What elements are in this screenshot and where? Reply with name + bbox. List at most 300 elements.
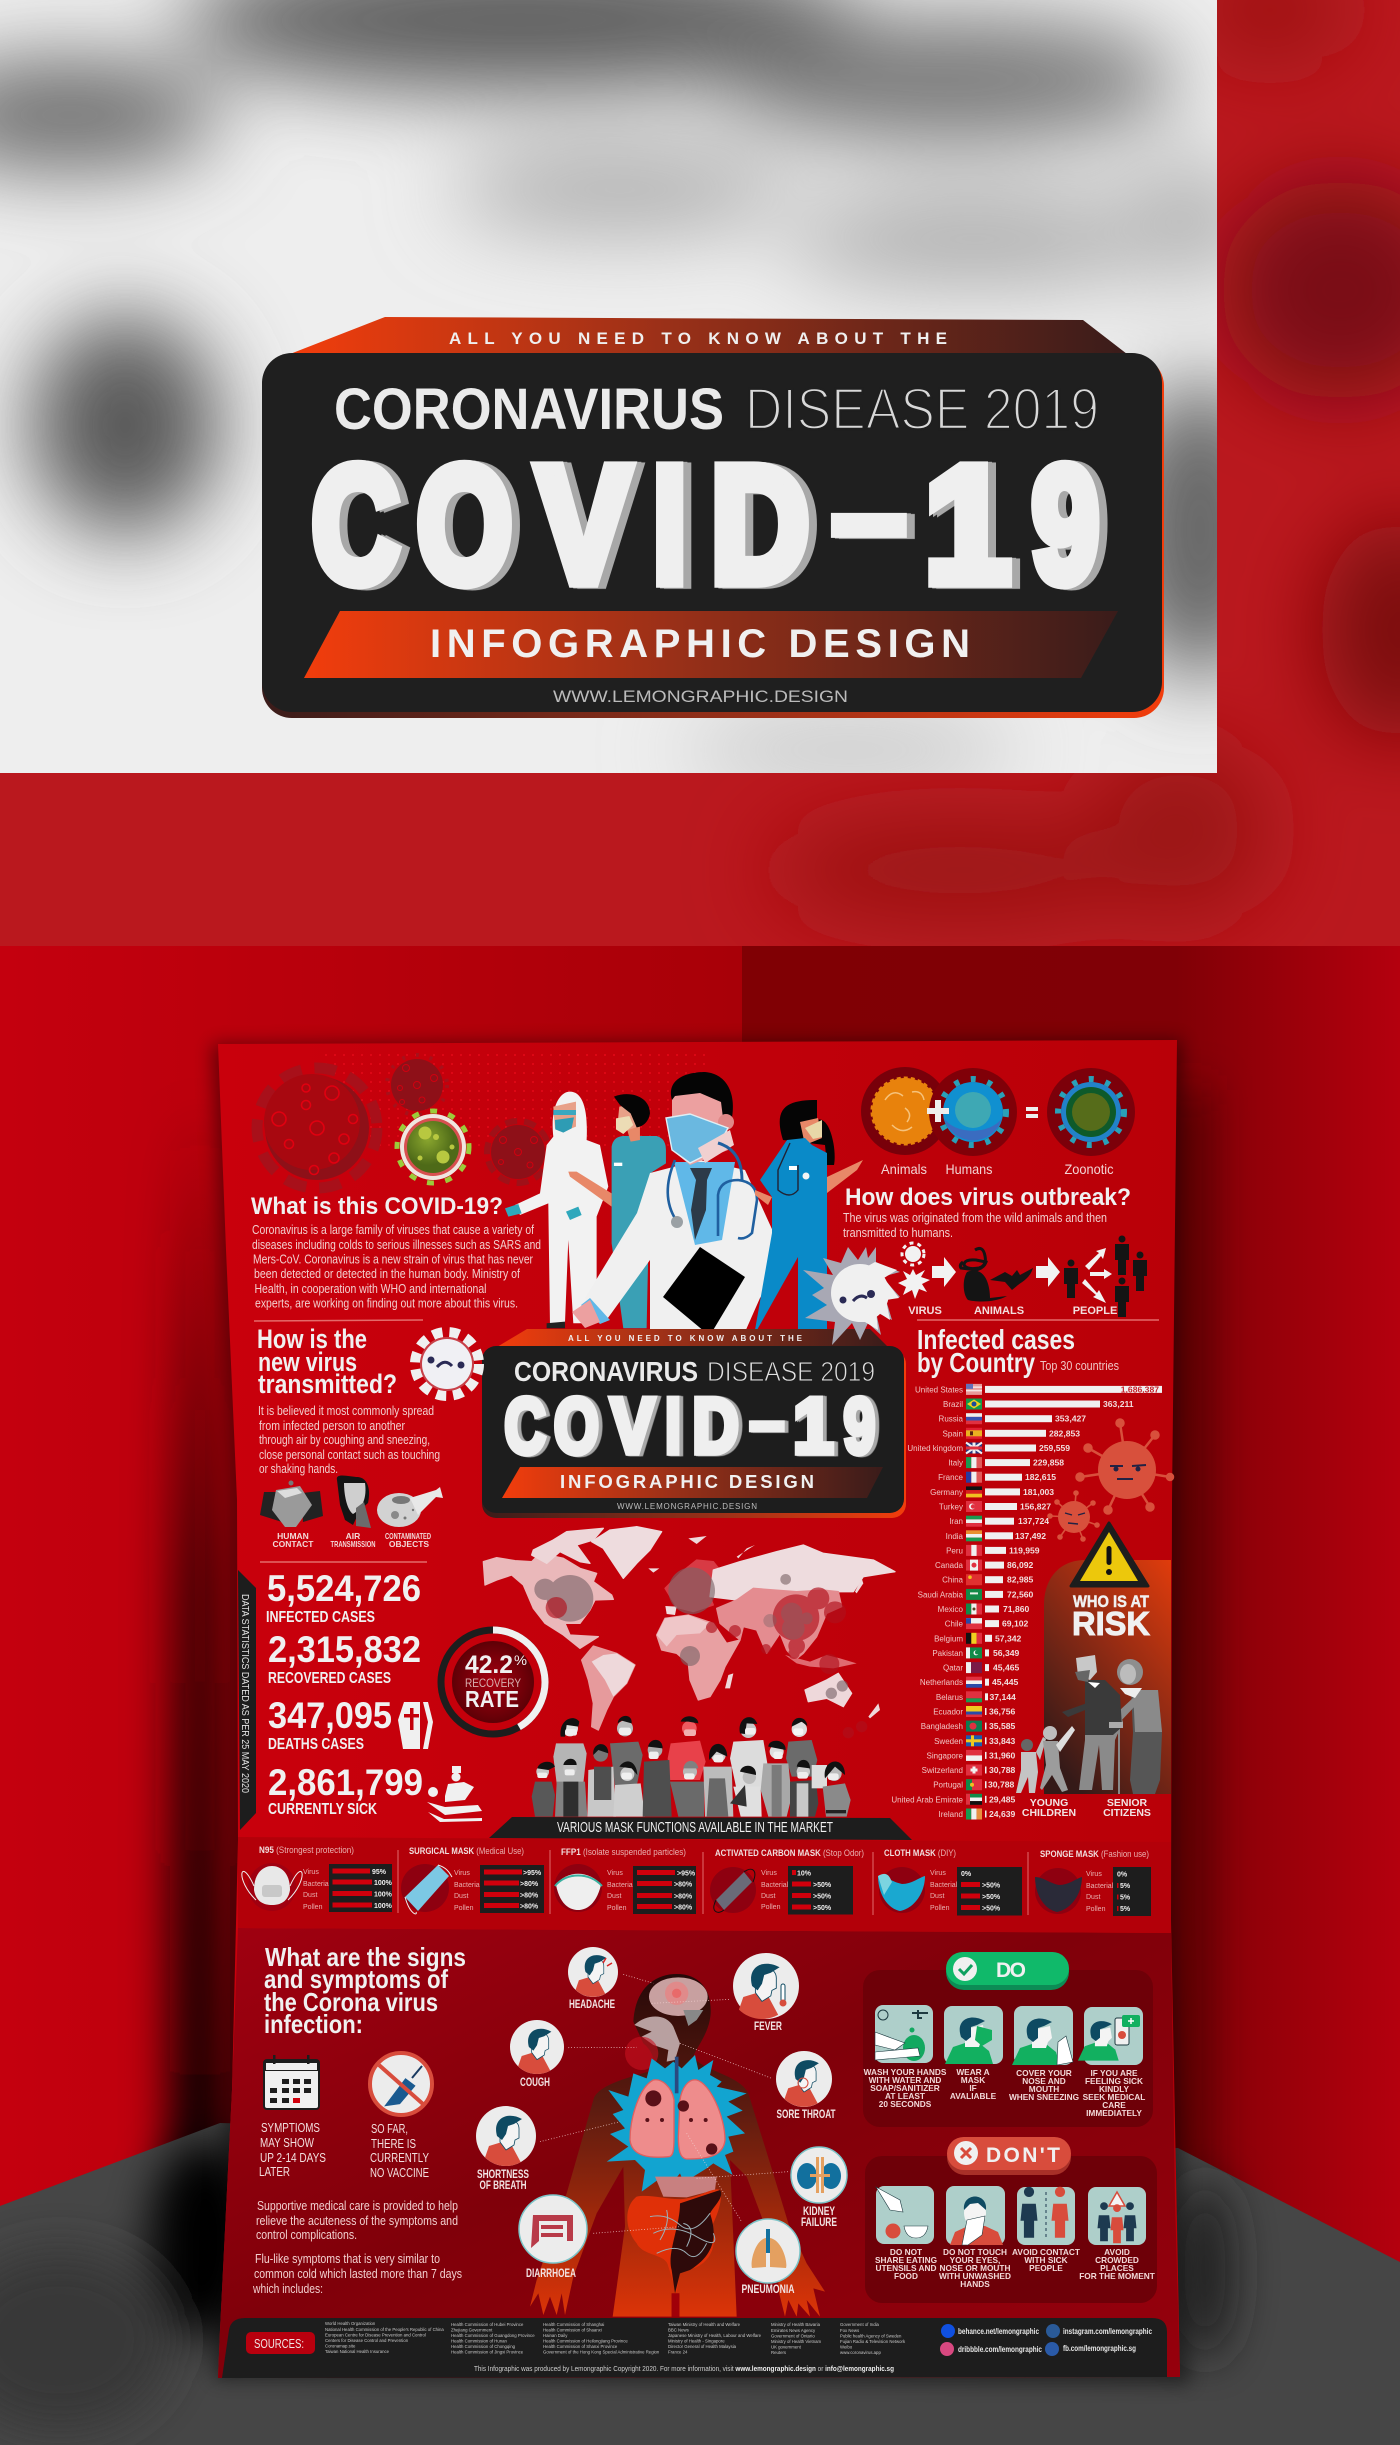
labels: SENIOR [1107,1797,1148,1809]
heading: infection: [264,2009,363,2039]
infected cases chart: 156,827 [1020,1502,1051,1512]
infected cases chart: 282,853 [1049,1428,1080,1438]
floor [0,2123,1400,2445]
infected cases chart: 353,427 [1055,1414,1086,1424]
table: >80% [520,1904,539,1910]
panel: do [863,1952,1153,2127]
blue burst [607,2055,747,2193]
labels: Pollen [454,1905,474,1912]
table [957,1867,1022,1916]
infected cases chart: 36,756 [989,1706,1016,1716]
table [788,1866,853,1914]
africa [657,1615,740,1700]
transmission section [257,1324,479,1549]
labels [930,1870,958,1912]
infected cases chart: Mexico [938,1605,964,1614]
source lists: Health Commission of Shanghai [543,2322,604,2327]
infected cases chart: 229,858 [1033,1458,1064,1468]
backdrop shadows on red surface [770,0,1400,925]
source lists: BBC News [668,2328,689,2332]
captions: DO NOT TOUCH [943,2247,1007,2257]
flu paragraph: common cold which lasted more than 7 days [254,2266,462,2281]
infected cases chart: 1,686,387 [1121,1384,1159,1394]
captions: PEOPLE [1029,2263,1063,2273]
paragraph: experts, are working on finding out more about this virus. [255,1296,518,1311]
infected cases chart: Qatar [943,1664,963,1673]
paragraph: from infected person to another [259,1418,406,1433]
icon: sponge mask [1035,1868,1082,1914]
table: >95% [523,1870,542,1877]
left lung [630,2080,674,2157]
statistics: DEATHS CASES [268,1736,364,1753]
captions: MOUTH [1029,2084,1059,2094]
pill: DO [996,1959,1026,1982]
infected cases chart: France [938,1473,964,1482]
infected cases chart: Portugal [933,1781,963,1790]
bar shape [489,1817,912,1840]
big title: - [825,421,913,603]
labels: Pollen [607,1905,627,1912]
labels [908,1305,1117,1317]
icon: carbon mask [710,1867,756,1913]
circle: animals [861,1067,949,1155]
infected cases chart: 72,560 [1007,1589,1034,1599]
labels: Virus [303,1869,319,1876]
badge card [262,353,1162,712]
icon labels: AIR [346,1531,360,1541]
paragraph: diseases including colds to serious illnesses such as SARS and [252,1237,541,1252]
labels: Pollen [930,1905,950,1912]
zoonotic diagram [861,1067,1135,1177]
vaccine text: SO FAR, [371,2121,408,2136]
symptom: headache: HEADACHE [569,1999,615,2011]
arctic russia islands [688,1536,755,1558]
panel background [865,2156,1157,2303]
people wearing masks [532,1716,851,1817]
infected cases chart [891,1324,1162,1820]
panel background [863,1970,1153,2127]
big title [312,421,1099,616]
tab [497,1329,888,1347]
card [482,1346,904,1513]
heading: Infected cases [917,1324,1075,1355]
icon: no vaccine [370,2053,432,2115]
labels: Humans [946,1161,992,1177]
tagline: ALL YOU NEED TO KNOW ABOUT THE [449,329,947,348]
site: WWW.LEMONGRAPHIC.DESIGN [617,1502,757,1511]
upper title badge [262,317,1164,718]
card side [482,1350,906,1518]
white paper sheet with leaf shadows [0,0,1285,780]
infected cases chart: 24,639 [989,1809,1016,1819]
lower photo: left wall [0,946,742,2246]
source lists: Japanese Ministry of Health, Labour and Welfare [668,2333,762,2338]
new zealand [868,1703,880,1718]
infected cases chart: Chile [945,1620,964,1629]
social: instagram [1046,2324,1152,2338]
captions: NOSE AND [1022,2076,1066,2086]
infected cases chart: Belgium [934,1634,963,1643]
table: >95% [677,1870,696,1878]
coronavirus: CORONAVIRUS [514,1356,698,1387]
heading: and symptoms of [264,1964,448,1994]
heading: transmitted? [258,1369,397,1399]
figure: blue nurse [755,1100,863,1330]
statistics: 5,524,726 [267,1568,421,1609]
centre disc [452,1641,534,1723]
big title: 1 [925,434,1010,616]
infected cases chart: Bangladesh [921,1722,963,1731]
captions: KINDLY [1099,2084,1130,2094]
arrow [1036,1257,1060,1287]
labels: Dust [454,1893,468,1900]
table: >50% [813,1894,832,1900]
banner text: INFOGRAPHIC DESIGN [430,622,970,666]
infected cases chart: Singapore [927,1751,964,1760]
irritation glow [625,2037,658,2070]
labels: VIRUS [908,1305,942,1317]
virus character white [415,1332,479,1396]
icon: person [1064,1260,1078,1298]
labels: YOUNG [1030,1797,1068,1809]
vaccine text [370,2121,429,2180]
paragraph: Coronavirus is a large family of viruses that cause a variety of [252,1222,534,1237]
social: dribbble [940,2342,1042,2356]
captions: CARE [1102,2100,1126,2110]
virus character spiky grey [803,1247,900,1345]
poster title badge [482,1329,906,1518]
labels: Animals [881,1161,927,1177]
source lists: Health Commission of Hunan [451,2338,507,2344]
source lists: Centers for Disease Control and Prevention [325,2338,409,2343]
labels [454,1870,482,1912]
labels: Pollen [761,1904,781,1911]
infected cases chart: Ireland [939,1810,963,1819]
source lists: www.coronavirus.app [840,2350,881,2355]
tab shape [238,1570,256,1830]
virus: small dark top [387,1055,447,1115]
social: dribbble: dribbble.com/lemongraphic [958,2345,1042,2354]
copyright line: This Infographic was produced by Lemongraphic Copyright 2020. For more information, visit www.lemongraphic.design or info@lemongraphic.sg [474,2366,894,2373]
icon: coffin [398,1702,433,1749]
badge top tab [290,317,1127,354]
infected cases chart: 45,445 [992,1677,1019,1687]
tab text: DATA STATISTICS DATED AS PER 25 MAY 2020 [239,1594,251,1793]
table: >80% [674,1894,693,1900]
labels: Dust [607,1893,621,1900]
heading: by Country [917,1347,1035,1378]
infected cases chart: Spain [943,1429,963,1438]
labels: Bacterial [930,1882,958,1889]
icon labels: OBJECTS [389,1539,429,1549]
captions: FOR THE MOMENT [1079,2271,1155,2281]
labels: Bacterial [454,1882,482,1889]
infected cases chart: 33,843 [989,1736,1016,1746]
virus: large dark [257,1068,377,1188]
world map [483,1527,895,1738]
who is at risk panel [1016,1523,1171,1819]
vaccine text: CURRENTLY [370,2150,429,2165]
spain [665,1606,677,1615]
icon: contaminated chicken [377,1487,443,1527]
title: O [554,1384,599,1470]
labels: Dust [761,1893,775,1900]
sources badge [246,2332,315,2354]
infected cases chart: 69,102 [1002,1619,1029,1629]
labels: Zoonotic [1064,1161,1114,1177]
table: >80% [674,1904,693,1912]
source lists: Government of Ontario [771,2334,815,2338]
care paragraph: control complications. [256,2227,357,2242]
captions: PLACES [1100,2263,1134,2273]
title: I [665,1384,681,1470]
table [480,1865,544,1913]
vaccine text: NO VACCINE [370,2165,429,2180]
fan arrows [1082,1248,1112,1303]
captions: WITH UNWASHED [939,2271,1011,2281]
infected cases chart: 71,860 [1003,1604,1030,1614]
source lists: Public health Agency of Sweden [840,2334,902,2338]
labels: Dust [930,1893,944,1900]
symptom: cough: COUGH [520,2077,550,2089]
tile: sharing [876,2186,934,2244]
paragraph [258,1403,440,1476]
tile: touching face [946,2186,1005,2245]
ring remainder [441,1630,545,1734]
captions: SOAP/SANITIZER [870,2083,940,2093]
table: >80% [520,1892,539,1900]
heading [264,1942,466,2039]
labels: Virus [607,1870,623,1877]
table [633,1866,696,1914]
captions: AVOID [1104,2247,1130,2257]
arctic islands [532,1528,603,1563]
captions [875,2247,1155,2289]
infected cases chart: Saudi Arabia [918,1590,964,1599]
title: D [692,1384,739,1470]
symptom: headache [568,1947,618,2011]
table: 95% [372,1869,387,1876]
mask section title bar [489,1817,912,1840]
big title: I [653,434,686,616]
poster sheet [212,1040,1190,2385]
lower photo: right wall [742,946,1400,2266]
panel: sponge mask [1035,1849,1151,1916]
lung viruses and faces [645,2090,717,2155]
table: >50% [813,1905,832,1912]
symptom timing text: SYMPTIOMS [261,2120,320,2135]
labels [881,1161,1114,1177]
poster shadow [212,1040,1190,2385]
source lists: Fox News [840,2328,859,2333]
trachea [671,2057,682,2093]
source lists: Coronamap.site [325,2344,356,2348]
captions: UTENSILS AND [876,2263,937,2273]
paragraph: or shaking hands. [259,1461,338,1476]
labels: CHILDREN [1022,1807,1076,1819]
table [1113,1867,1151,1916]
infected cases chart: Iran [949,1517,963,1526]
figure: hazmat worker [505,1092,608,1328]
infected cases chart: 45,465 [993,1663,1020,1673]
source lists: Director General of Health Malaysia [668,2344,737,2349]
circle: humans [929,1068,1017,1156]
icon: cloth mask [878,1867,925,1913]
symptom timing text: UP 2-14 DAYS [260,2150,326,2165]
symptom: fever: FEVER [754,2021,783,2033]
social: facebook: fb.com/lemongraphic.sg [1063,2344,1136,2353]
nose and mouth [634,2016,680,2062]
warning triangle [1071,1523,1148,1586]
source lists: Ministry of Health Vietnam [771,2339,821,2344]
infected cases chart: 31,960 [989,1750,1016,1760]
table: >50% [982,1894,1001,1901]
symptom: shortness of breath: SHORTNESS [477,2169,529,2181]
flu paragraph: Flu-like symptoms that is very similar to [255,2251,440,2266]
people [1115,1236,1147,1317]
symptom timing text: MAY SHOW [260,2135,315,2150]
labels: Virus [1086,1871,1102,1878]
heading: What is this COVID-19? [251,1193,503,1220]
connector lines [540,1974,788,2233]
tagline: ALL YOU NEED TO KNOW ABOUT THE [568,1334,803,1343]
infected cases chart: 363,211 [1103,1399,1134,1409]
icon: FFP1 mask [554,1864,602,1912]
icon: virus [898,1243,930,1299]
tile: contact [1017,2187,1075,2245]
south asia [717,1588,842,1660]
infected cases chart: 57,342 [995,1633,1022,1643]
statistics: 347,095 [268,1695,392,1736]
infected cases chart: Germany [930,1488,963,1497]
captions: 20 SECONDS [879,2099,932,2109]
badge side edge [262,356,1164,718]
labels: Pollen [303,1904,323,1911]
paragraph: through air by coughing and sneezing, [259,1432,430,1447]
statistics: INFECTED CASES [266,1609,375,1626]
source lists: Ministry of Health - Singapore [668,2338,725,2344]
labels: Virus [454,1870,470,1877]
labels [1086,1871,1114,1913]
captions: WITH WATER AND [869,2075,941,2085]
outbreak section [843,1184,1147,1317]
liver [655,2177,717,2197]
labels [1022,1797,1151,1819]
labels [607,1870,635,1912]
heading [917,1324,1075,1378]
source lists: Government of the Hong Kong Special Administrative Region [543,2350,660,2354]
title: C [505,1384,546,1470]
pill [947,2137,1071,2175]
captions: SHARE EATING [875,2255,937,2265]
social: facebook [1045,2342,1136,2356]
symptom: sore throat: SORE THROAT [776,2109,836,2121]
percent: 42.2 [465,1651,513,1679]
care paragraph: relieve the acuteness of the symptoms and [256,2213,458,2228]
tile: call [1078,2007,1143,2065]
source lists: Hainan Daily [543,2333,568,2338]
symptom: pneumonia [736,2219,800,2296]
panel: cloth mask [878,1848,1022,1916]
infected cases chart: Switzerland [922,1766,963,1775]
icon labels: CONTAMINATED [385,1531,431,1541]
banner text: INFOGRAPHIC DESIGN [560,1471,814,1492]
captions: IF YOU ARE [1090,2068,1138,2078]
paragraph: Health, in cooperation with WHO and international [254,1281,487,1296]
symptom: cough [510,2020,564,2089]
source lists: Health Commission of Heilongjiang Province [543,2338,628,2344]
sources badge: SOURCES: [254,2336,304,2351]
captions: AVALIABLE [950,2091,997,2101]
symptom: kidney failure: KIDNEY [803,2206,835,2218]
captions: DO NOT [890,2247,922,2257]
footer background [222,2318,1167,2378]
title: ACTIVATED CARBON MASK (Stop Odor) [715,1848,864,1859]
table: >50% [982,1906,1001,1912]
circle: zoonotic [1047,1068,1135,1156]
source lists: Taiwan National Health Insurance [325,2349,390,2354]
source lists: European Centre for Disease Prevention and Control [325,2332,426,2338]
recovery rate ring [441,1630,545,1734]
paragraph: been detected or detected in the human body. Ministry of [254,1266,520,1281]
case bubbles [534,1567,867,1738]
table: >50% [813,1882,832,1889]
figure: teal nurse [568,1094,666,1328]
captions: WHEN SNEEZING [1009,2092,1079,2102]
captions: COVER YOUR [1016,2068,1072,2078]
spine end [672,2293,679,2317]
heading [257,1324,397,1399]
infected cases chart: 119,959 [1009,1545,1040,1555]
brain [649,1977,708,2026]
percent sign: % [514,1652,527,1668]
labels: Bacterial [1086,1883,1114,1890]
table: 5% [1120,1894,1131,1902]
labels: Bacterial [761,1882,789,1889]
captions [864,2067,1145,2118]
panel: don't [865,2137,1157,2303]
infected cases chart: 182,615 [1025,1472,1056,1482]
labels: Virus [930,1870,946,1877]
infected cases chart: 86,092 [1007,1560,1034,1570]
captions: MASK [961,2075,985,2085]
panel: N95 [242,1845,393,1912]
labels: ANIMALS [974,1305,1024,1317]
icon: patient and nurse [427,1766,482,1822]
infected cases chart: 259,559 [1039,1443,1070,1453]
table: 5% [1120,1906,1131,1913]
symptoms intro [252,1942,466,2296]
poster base [218,1040,1180,2378]
north america [483,1553,613,1648]
website: WWW.LEMONGRAPHIC.DESIGN [553,687,848,706]
care paragraph [256,2198,458,2242]
infected cases chart: Pakistan [932,1649,963,1658]
table [329,1864,393,1912]
labels: PEOPLE [1073,1305,1117,1317]
dark intestine side [671,2190,721,2293]
heading: How does virus outbreak? [845,1184,1131,1211]
ring recovered [493,1630,545,1727]
icon: coughing face [337,1475,371,1528]
infected cases chart: United Arab Emirate [891,1795,964,1804]
icon: N95 mask [242,1863,302,1911]
europe [665,1560,720,1612]
statistics: 2,861,799 [268,1762,423,1803]
labels: Virus [761,1870,777,1877]
title: V [611,1384,654,1470]
infected cases chart: 35,585 [989,1721,1016,1731]
